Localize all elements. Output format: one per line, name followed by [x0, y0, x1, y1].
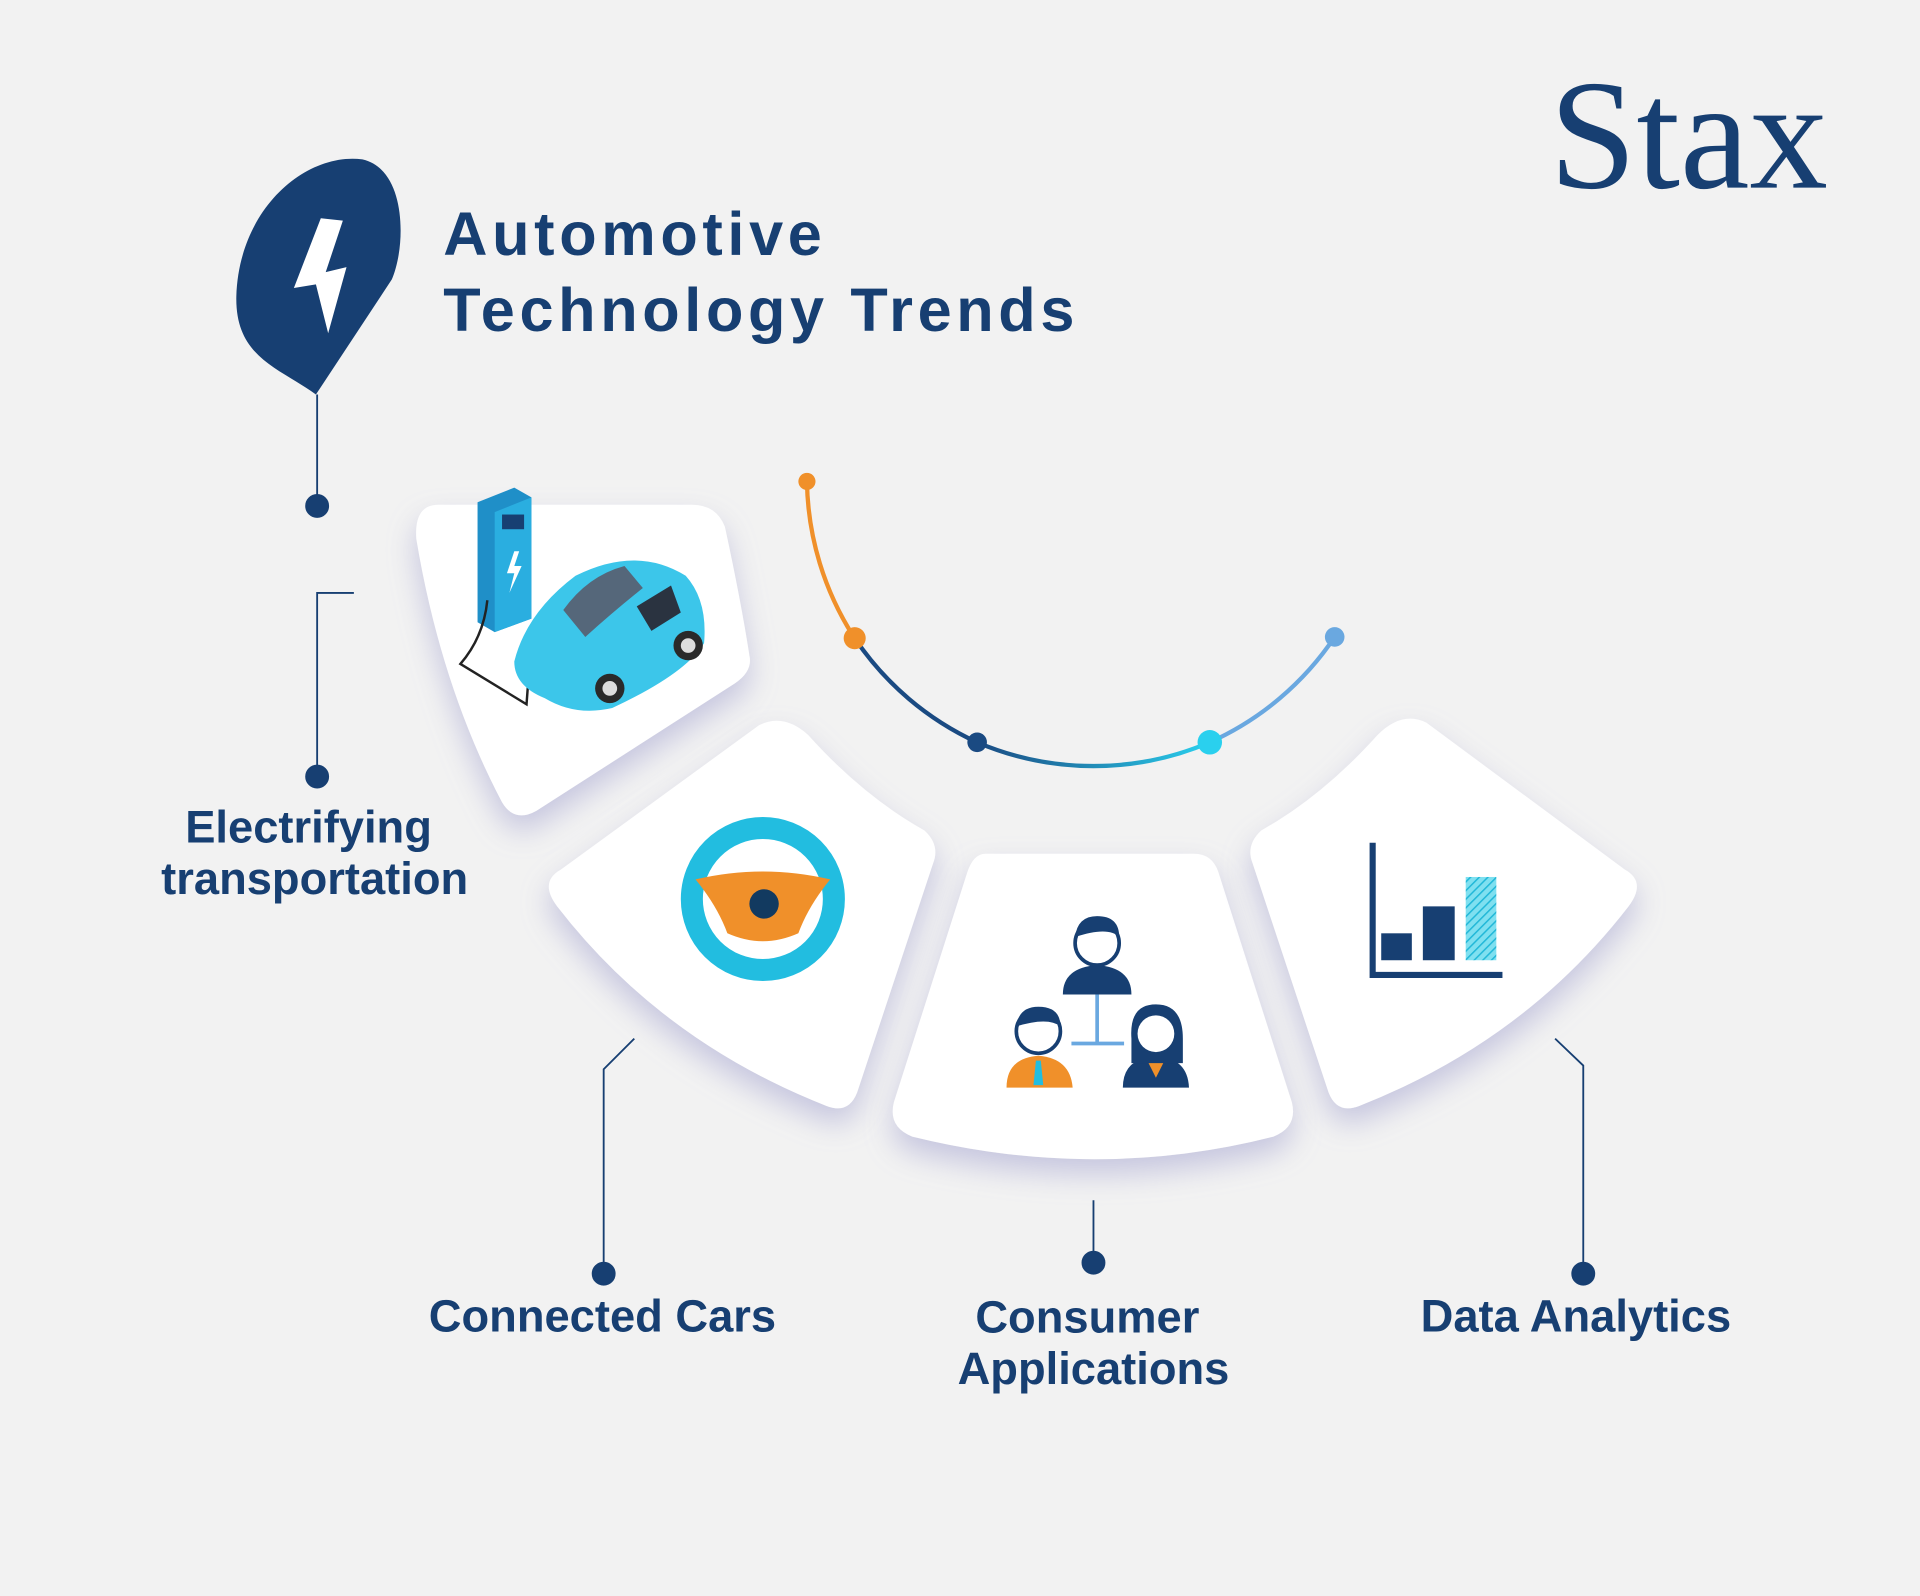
- icon: charger and car: [460, 488, 705, 711]
- card: data analytics: [1250, 719, 1637, 1108]
- title: Automotive: [443, 200, 826, 268]
- label: Electrifying transportation: transportation: [161, 853, 468, 904]
- connectors: bottom labels: [593, 1039, 1594, 1285]
- label: Connected Cars: Connected Cars: [429, 1290, 776, 1341]
- label: Consumer Applications: [958, 1291, 1229, 1394]
- icon: steering wheel: [692, 828, 834, 970]
- icon: bar chart: [1373, 843, 1502, 975]
- card: electrifying transportation: [416, 488, 750, 815]
- title: [443, 200, 1079, 344]
- icon: pin with lightning: [236, 159, 401, 395]
- arc timeline: [798, 473, 1344, 766]
- icon: people network: [1007, 916, 1189, 1088]
- label: Data Analytics: Data Analytics: [1421, 1290, 1731, 1341]
- connector: electrifying: [306, 395, 354, 788]
- card: consumer applications: [893, 854, 1293, 1159]
- card: connected cars: [549, 721, 935, 1108]
- label: Consumer Applications: Consumer: [975, 1291, 1199, 1342]
- label: Electrifying transportation: Electrifying: [185, 802, 432, 853]
- label: Consumer Applications: Applications: [958, 1343, 1229, 1394]
- label: Electrifying transportation: [161, 802, 468, 904]
- title: Technology Trends: [443, 276, 1079, 344]
- logo: Stax: Stax: [1549, 48, 1828, 222]
